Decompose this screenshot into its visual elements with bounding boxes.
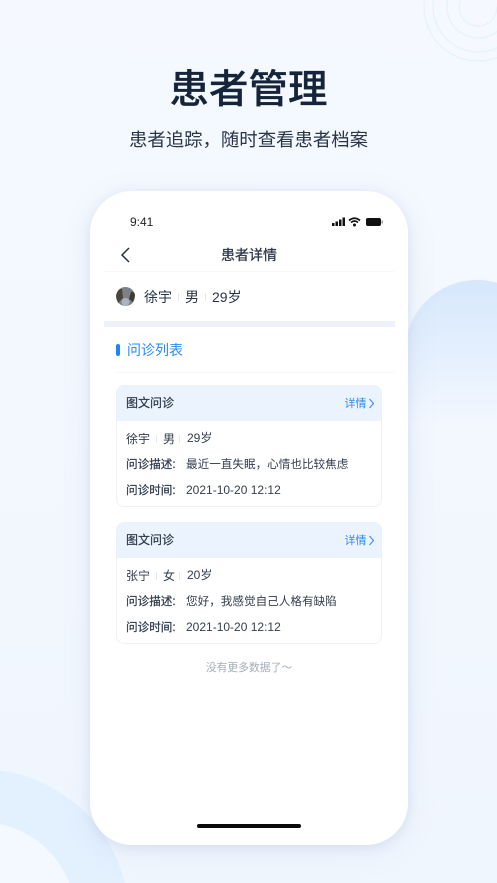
consultation card 2: 2021-10-20 12:12 (186, 620, 281, 634)
patient info: 男 (185, 289, 199, 305)
card 1 patient: 男 (163, 432, 175, 446)
section divider (116, 372, 395, 373)
consultation card 1: 最近一直失眠，心情也比较焦虑 (186, 458, 348, 471)
consultation card 2: 您好，我感觉自己人格有缺陷 (186, 595, 337, 608)
panel: phone mockup (90, 191, 408, 845)
consultation card 2 (116, 522, 382, 644)
card 1 patient (126, 431, 212, 446)
section divider band (104, 321, 395, 327)
section heading: consultation list: 问诊列表 (127, 342, 183, 358)
patient info: 徐宇 (144, 289, 172, 305)
card 2 description: 问诊描述: (126, 595, 176, 608)
patient avatar (116, 287, 135, 306)
end of list note: 没有更多数据了～ (206, 662, 292, 674)
card 1 patient: 29岁 (187, 431, 212, 445)
card 2 description (126, 595, 337, 608)
consultation card 1 (116, 385, 382, 507)
card 1 header (117, 386, 381, 421)
nav divider (104, 271, 394, 272)
card 1 time (126, 483, 281, 497)
card 2 patient: 女 (163, 569, 175, 583)
nav title: 患者详情 (221, 247, 277, 263)
patient info (144, 289, 242, 305)
card 2 time: 问诊时间: (126, 621, 176, 634)
home indicator (197, 824, 301, 828)
card 1 header: 详情 (344, 398, 366, 410)
card 2 patient (126, 568, 212, 583)
card 1 patient: 徐宇 (126, 432, 150, 446)
back arrow (121, 248, 130, 262)
card 1 header: 图文问诊 (126, 396, 174, 410)
card 2 header: 详情 (344, 535, 366, 547)
status bar icons (332, 217, 383, 226)
card 2 patient: 20岁 (187, 568, 212, 582)
consultation card 1: 2021-10-20 12:12 (186, 483, 281, 497)
card 1 description: 问诊描述: (126, 458, 176, 471)
card 2 header: 图文问诊 (126, 533, 174, 547)
card 2 header (117, 523, 381, 558)
title: 患者管理 (170, 68, 328, 112)
card 2 time (126, 620, 281, 634)
card 2 patient: 张宁 (126, 569, 150, 583)
subtitle: 患者追踪，随时查看患者档案 (129, 129, 368, 150)
card 1 description (126, 458, 348, 471)
card 1 time: 问诊时间: (126, 484, 176, 497)
patient info: 29岁 (212, 289, 242, 305)
status bar time: 9:41 (130, 215, 153, 229)
